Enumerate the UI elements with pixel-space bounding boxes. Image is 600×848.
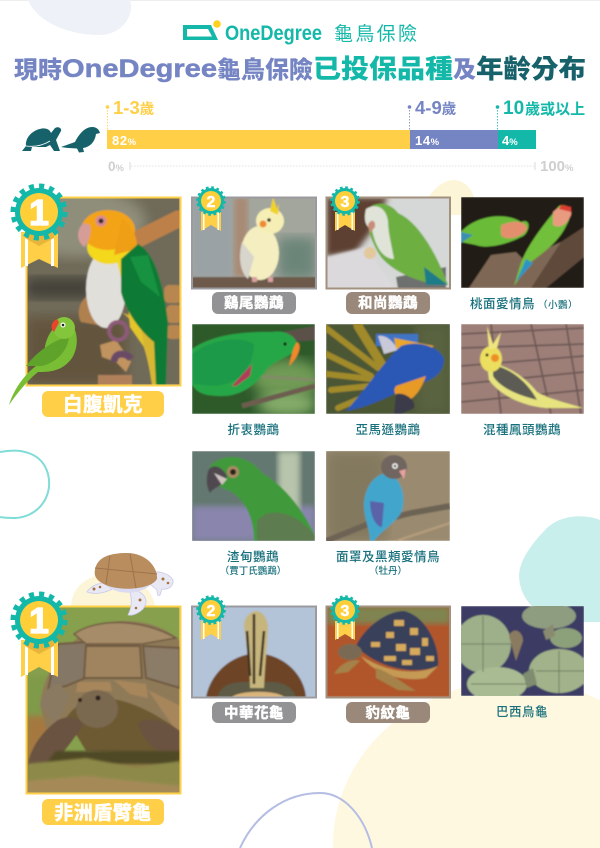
age distribution bar chart [106, 97, 585, 175]
photo: eclectus parrot [192, 324, 315, 414]
ribbon [335, 212, 355, 231]
title: 龜鳥保險 [217, 50, 313, 85]
photo: african spurred tortoise [28, 608, 180, 792]
label: 面罩及黑頰愛情鳥 [336, 546, 440, 577]
name pill: 非洲盾臂龜: 非洲盾臂龜 [54, 798, 152, 825]
rank medal 2: 2 [207, 194, 216, 211]
name pill: 和尚鸚鵡: 和尚鸚鵡 [358, 292, 418, 313]
name pill: 鷄尾鸚鵡: 鷄尾鸚鵡 [224, 292, 284, 313]
logo mark [183, 20, 221, 40]
panel: masked and black-cheeked lovebird [326, 451, 450, 577]
photo: cockatiel on paving [461, 324, 584, 414]
logo chinese name: 龜鳥保險 [334, 19, 417, 46]
rank medal 2: 2 [207, 603, 216, 620]
photo frame [192, 606, 316, 698]
axis 0% to 100%: 0% [108, 159, 125, 174]
name pill: 豹紋龜: 豹紋龜 [366, 702, 410, 723]
age label: 4-9 years: 4-9歲 [415, 97, 456, 119]
rank medal 1 [13, 594, 65, 646]
title: 現時 [14, 50, 62, 85]
label: 渣甸鸚鵡 [220, 546, 286, 577]
label: 面罩及黑頰愛情鳥: （牡丹） [369, 563, 407, 577]
icon: bird silhouette [61, 127, 100, 152]
title: 年齡分布 [476, 49, 586, 86]
bar segment 4%: 4% [502, 133, 518, 148]
label: 亞馬遜鸚鵡: 亞馬遜鸚鵡 [355, 419, 421, 438]
label: 桃面愛情鳥: 桃面愛情鳥 （小鸚） [470, 293, 578, 312]
photo frame [26, 606, 180, 794]
gold ribbon [21, 232, 58, 268]
title [14, 49, 586, 86]
ribbon [335, 621, 355, 640]
axis 0% to 100%: 100% [540, 158, 574, 175]
logo [183, 19, 417, 46]
ribbon [201, 212, 221, 231]
label: 巴西烏龜: 巴西烏龜 [496, 701, 548, 720]
rank medal 1: 1 [29, 600, 49, 641]
photo: red-eared sliders [461, 606, 584, 696]
label: 渣甸鸚鵡: （賈丁氏鸚鵡） [220, 563, 286, 577]
ribbon [201, 621, 221, 640]
age label: 4-9 years [408, 97, 456, 130]
label: 渣甸鸚鵡: 渣甸鸚鵡 [227, 546, 279, 565]
name pill: 白腹凱克: 白腹凱克 [63, 388, 143, 417]
photo: blue and gold macaw [326, 324, 450, 414]
panel: rank 3 monk parakeet [326, 188, 450, 314]
panel: rank 2 cockatiel [192, 188, 316, 314]
panel: rank 1 tortoise african spurred tortoise [13, 553, 180, 825]
panel: rank 3 leopard tortoise [326, 596, 450, 723]
panel: rank 1 bird white-bellied caique [6, 186, 182, 417]
photo frame [326, 198, 450, 288]
photo frame [26, 198, 180, 386]
label: 混種鳳頭鸚鵡: 混種鳳頭鸚鵡 [483, 419, 561, 438]
age label: 1-3 years: 1-3歲 [113, 97, 154, 119]
name pill: 白腹凱克 [42, 388, 164, 417]
name pill: 中華花龜: 中華花龜 [224, 702, 284, 723]
panel: eclectus parrot [192, 324, 322, 438]
bar segment 82%: 82% [112, 133, 137, 148]
photo frame [192, 198, 316, 288]
age label: 1-3 years [106, 97, 154, 130]
icon: tortoise silhouette [22, 127, 61, 151]
panel: rosy-faced lovebird [461, 197, 584, 312]
photo: white-bellied caique [28, 198, 180, 384]
age label: 10 years or above [496, 98, 585, 130]
axis 0% to 100% [108, 158, 574, 175]
photo: blue masked lovebird [326, 451, 450, 541]
panel: rank 2 chinese striped-neck turtle [192, 596, 316, 723]
photo: cockatiel [193, 198, 315, 288]
photo: striped-neck turtle [193, 608, 315, 696]
bar segment 14% [410, 130, 498, 149]
rank medal 1: 1 [29, 192, 49, 233]
panel: red-eared slider [455, 603, 589, 720]
gold ribbon [21, 640, 58, 677]
label: 面罩及黑頰愛情鳥: 面罩及黑頰愛情鳥 [336, 546, 440, 565]
logo wordmark: OneDegree [225, 22, 322, 45]
title: 已投保品種 [313, 49, 453, 86]
photo: rosy-faced lovebirds [461, 197, 584, 288]
bar segment 14%: 14% [415, 133, 440, 148]
label: 折衷鸚鵡: 折衷鸚鵡 [227, 419, 280, 438]
bar segment 4% [498, 130, 536, 149]
title: 及 [453, 50, 476, 84]
photo: leopard tortoise [328, 608, 449, 696]
panel: jardine's parrot [192, 451, 315, 577]
rank medal 3: 3 [341, 603, 350, 620]
age label: 10 years or above: 10歲或以上 [503, 98, 585, 119]
photo frame [326, 606, 450, 698]
rank medal 1 [13, 186, 65, 238]
bar segment 82% [107, 130, 410, 149]
icon: green parakeet [9, 317, 77, 405]
panel: amazon parrot macaw [326, 324, 450, 438]
title: OneDegree [62, 55, 217, 83]
icon: sea turtle [87, 553, 173, 615]
rank medal 3: 3 [341, 194, 350, 211]
photo: monk parakeet [328, 198, 449, 288]
photo: jardine's parrot [192, 451, 315, 541]
panel: mixed cockatiel [461, 324, 584, 438]
